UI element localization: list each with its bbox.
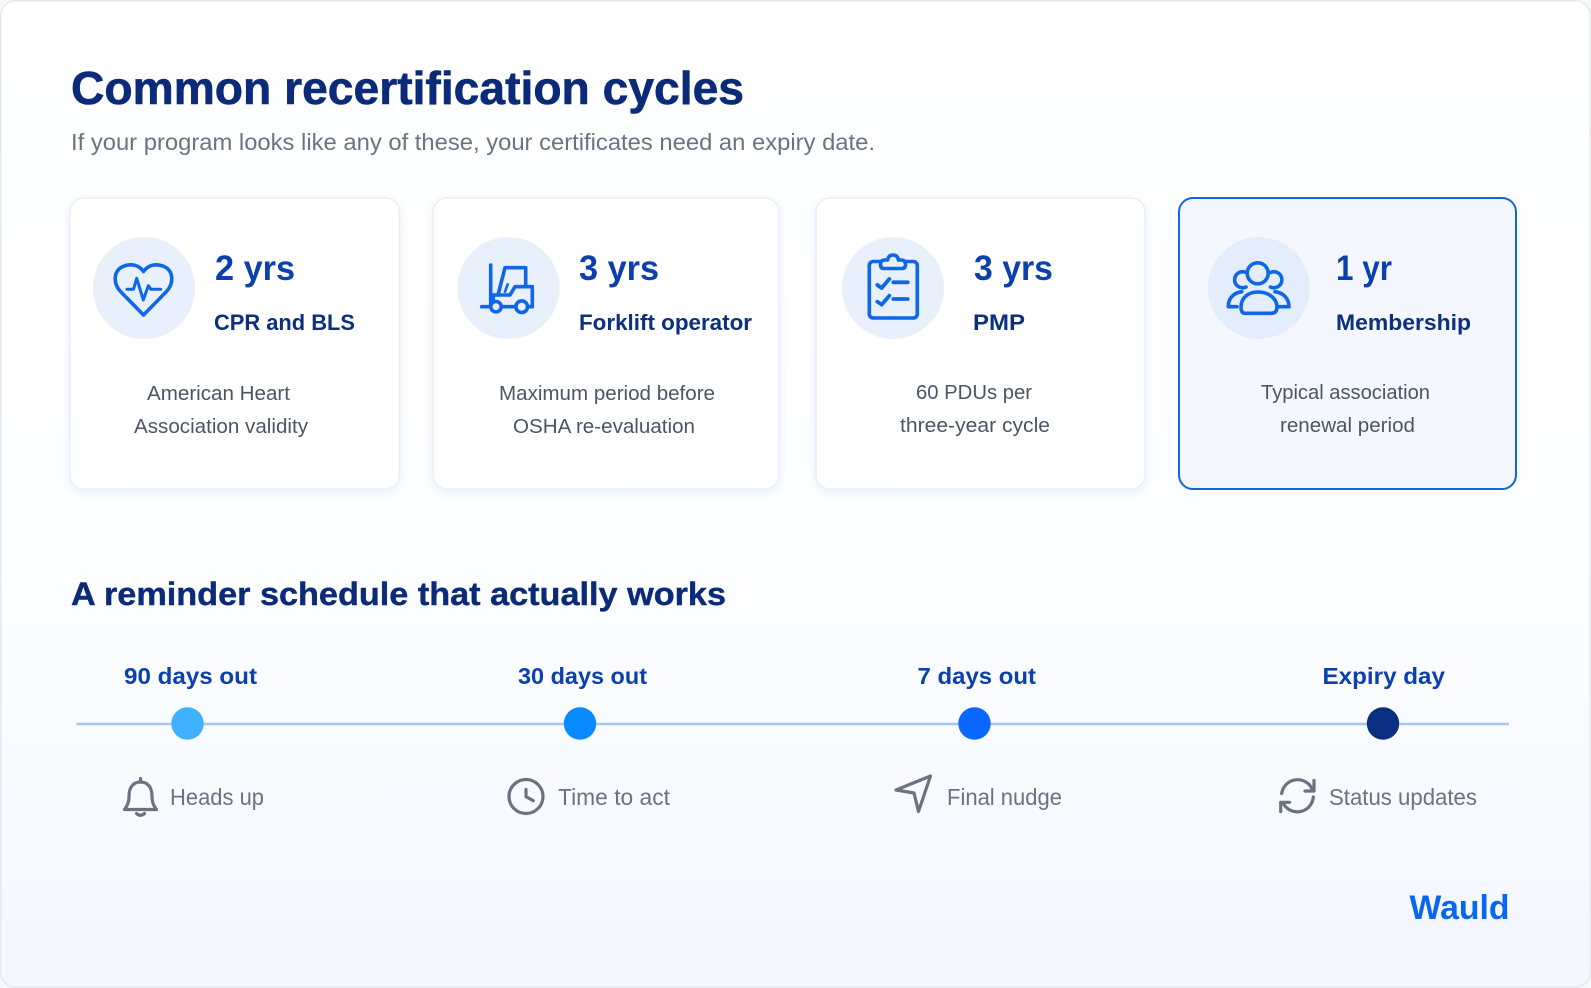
panel: membership card (highlighted) [1179,198,1516,489]
panel: membership card (highlighted): 1 yr [1336,249,1392,288]
step: expiry day [1281,663,1477,812]
step: 90 days out [124,663,264,815]
icon: clock [509,780,543,814]
panel: forklift operator card [433,198,779,489]
step: expiry day: Expiry day [1322,663,1445,689]
icon: clipboard checklist [869,255,917,318]
panel: forklift operator card: 3 yrs [579,249,659,288]
step: 30 days out: Time to act [558,784,671,810]
timeline [76,663,1509,815]
icon: heart with pulse [115,265,172,315]
panel: forklift operator card: OSHA re-evaluation [513,416,695,438]
panel: CPR and BLS card: American Heart [147,383,290,405]
panel: membership card (highlighted): Typical association [1261,382,1430,404]
step: expiry day: Status updates [1329,784,1477,810]
step: 30 days out: 30 days out [518,663,647,689]
icon: group of people [1228,263,1289,313]
section heading: A reminder schedule that actually works [71,576,726,612]
panel: CPR and BLS card: CPR and BLS [214,310,355,335]
title: Common recertification cycles [71,62,744,114]
panel: PMP card: 3 yrs [974,249,1053,288]
subtitle: If your program looks like any of these, your certificates need an expiry date. [71,129,875,155]
panel: membership card (highlighted): Membership [1336,310,1471,335]
panel: CPR and BLS card: 2 yrs [215,249,295,288]
brand wordmark: Wauld [1410,889,1510,927]
panel: PMP card: three-year cycle [900,415,1050,437]
panel: membership card (highlighted): renewal period [1280,415,1415,437]
panel: CPR and BLS card [70,198,400,489]
step: 90 days out: 90 days out [124,663,257,689]
panel: PMP card [816,198,1145,489]
icon: forklift [482,265,532,313]
step: 7 days out [896,663,1062,812]
panel: PMP card: 60 PDUs per [916,382,1032,404]
step: 30 days out [509,663,671,814]
step: 7 days out: 7 days out [918,663,1036,689]
step: 7 days out: Final nudge [947,784,1062,810]
panel: CPR and BLS card: Association validity [134,416,308,438]
panel: PMP card: PMP [973,310,1025,335]
panel: forklift operator card: Forklift operator [579,310,752,335]
panel: forklift operator card: Maximum period before [499,383,715,405]
icon: refresh arrows [1281,780,1314,812]
icon: paper plane [896,776,930,812]
icon: bell [124,778,156,815]
step: 90 days out: Heads up [170,784,264,810]
